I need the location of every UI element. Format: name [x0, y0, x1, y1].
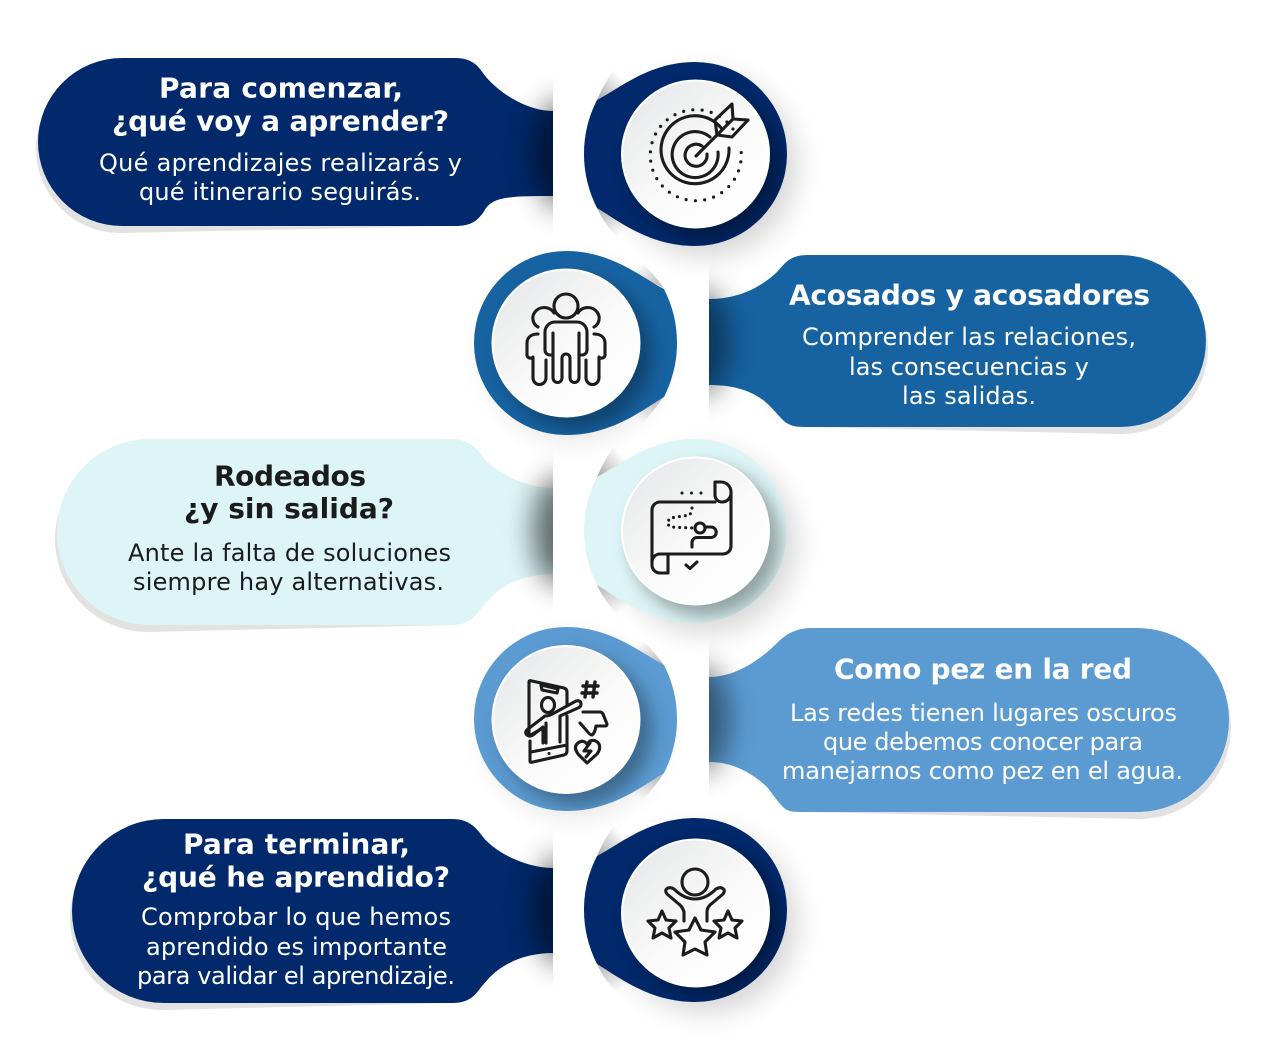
- disc: [622, 80, 769, 228]
- description: manejarnos como pez en el agua.: [782, 757, 1183, 785]
- description: Ante la falta de soluciones: [128, 539, 451, 567]
- panel: rodeados: [55, 439, 593, 632]
- description: Comprender las relaciones,: [802, 323, 1136, 351]
- heading: ¿y sin salida?: [184, 492, 394, 525]
- description: siempre hay alternativas.: [133, 568, 444, 596]
- panel: para terminar: [70, 819, 593, 1010]
- description: [782, 699, 1183, 785]
- panel: step 1 circle: [584, 50, 796, 256]
- pill end shadow: [520, 839, 553, 981]
- disc shadow: [502, 279, 652, 429]
- description: para validar el aprendizaje.: [137, 962, 455, 990]
- outer shadow: [488, 266, 660, 438]
- heading: Acosados y acosadores: [789, 278, 1150, 312]
- heading: [184, 460, 394, 525]
- disc: [492, 646, 640, 793]
- description: Comprobar lo que hemos: [141, 903, 451, 931]
- icon: target with arrow: [650, 104, 748, 201]
- pill end shadow: [709, 272, 744, 412]
- pill base shadow: [70, 826, 452, 1010]
- panel: step 3 circle: [584, 427, 796, 633]
- pill end shadow: [709, 649, 747, 789]
- heading: Para terminar,: [183, 828, 410, 860]
- description: las consecuencias y: [849, 353, 1089, 381]
- heading: Para comenzar,: [159, 72, 403, 104]
- pill: para terminar: [72, 819, 553, 1003]
- outer shadow: [616, 832, 796, 1012]
- panel: step 4 circle: [474, 625, 677, 817]
- pill end shadow: [513, 460, 553, 602]
- disc: [492, 270, 640, 416]
- outer shadow: [616, 76, 796, 256]
- pill: para comenzar: [38, 58, 553, 226]
- panel: como pez en la red: [669, 628, 1231, 819]
- disc shadow: [631, 467, 781, 617]
- swoosh shadow: [597, 50, 652, 254]
- heading: Como pez en la red: [834, 652, 1132, 686]
- swoosh shadow: [606, 625, 664, 817]
- description: las salidas.: [902, 382, 1036, 410]
- outer ring: [584, 62, 787, 246]
- pill base shadow: [55, 446, 452, 632]
- icon: scroll map: [652, 482, 731, 573]
- description: [802, 323, 1136, 410]
- outer ring: [584, 818, 787, 1002]
- pill base shadow: [805, 635, 1231, 819]
- description: [128, 539, 451, 596]
- pill: rodeados: [57, 439, 553, 625]
- disc shadow: [502, 655, 652, 805]
- heading: [142, 828, 450, 894]
- icon: person leaving phone with social symbols: [526, 681, 607, 763]
- disc: [622, 840, 769, 986]
- swoosh shadow: [606, 248, 664, 440]
- heading: [112, 72, 449, 138]
- pill base shadow: [36, 65, 455, 233]
- heading: ¿qué voy a aprender?: [112, 104, 449, 138]
- outer shadow: [616, 453, 796, 633]
- disc: [622, 458, 769, 604]
- pill: acosados: [709, 255, 1206, 427]
- pill base shadow: [805, 262, 1208, 434]
- description: qué itinerario seguirás.: [139, 178, 421, 206]
- description: Las redes tienen lugares oscuros: [790, 699, 1177, 727]
- outer shadow: [488, 642, 660, 814]
- disc shadow: [631, 846, 781, 996]
- swoosh shadow: [597, 427, 652, 631]
- description: que debemos conocer para: [823, 728, 1143, 756]
- outer ring: [474, 627, 677, 811]
- pill end shadow: [520, 83, 553, 225]
- disc shadow: [631, 90, 781, 240]
- heading: Rodeados: [214, 460, 366, 492]
- description: Qué aprendizajes realizarás y: [99, 149, 462, 177]
- swoosh shadow: [597, 806, 652, 1010]
- panel: step 2 circle: [474, 248, 677, 440]
- pill: como pez: [709, 628, 1229, 812]
- heading: ¿qué he aprendido?: [142, 860, 450, 894]
- icon: group of people: [527, 294, 605, 384]
- description: [137, 903, 455, 990]
- outer ring: [474, 251, 677, 435]
- panel: step 5 circle: [584, 806, 796, 1012]
- panel: para comenzar: [36, 58, 593, 233]
- description: [99, 149, 462, 206]
- description: aprendido es importante: [146, 933, 447, 961]
- panel: acosados y acosadores: [669, 255, 1208, 434]
- outer ring: [584, 439, 787, 623]
- icon: person with three stars: [648, 869, 742, 955]
